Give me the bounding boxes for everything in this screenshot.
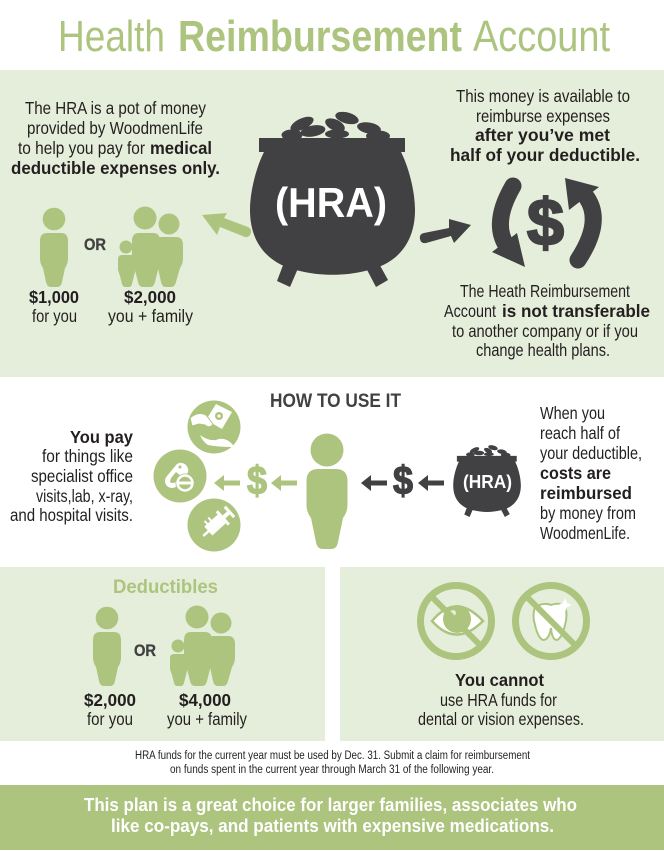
text block: not transferable: is not transferable: [502, 301, 650, 321]
banner: [0, 785, 664, 850]
footnote: on funds spent in the current year through March 31 of the following year.: [170, 764, 494, 776]
icon: green dollar: $: [247, 459, 267, 503]
icon: small pot: (HRA): [463, 472, 512, 492]
text block: when you reach half: reach half of: [540, 423, 620, 443]
arrow: green left 1: [214, 475, 240, 491]
text block: when you reach half: When you: [540, 403, 605, 423]
panel: you cannot: [340, 567, 664, 741]
text: $2,000 for you: $2,000: [84, 690, 136, 710]
text block: availability: half of your deductible.: [450, 145, 640, 165]
text: $1,000 for you: for you: [32, 306, 77, 326]
icon: small pot: [453, 444, 521, 517]
text block: availability: reimburse expenses: [476, 106, 610, 126]
text block: you cannot: use HRA funds for: [440, 690, 557, 710]
text block: not transferable: Account: [444, 301, 496, 321]
text block: HRA description: to help you pay for: [18, 138, 145, 158]
text: $4,000 you + family: [167, 690, 247, 729]
icon: single person: [93, 607, 121, 686]
text block: when you reach half: by money from: [540, 503, 636, 523]
icon: person: [306, 434, 348, 549]
text block: when you reach half: reimbursed: [540, 483, 632, 503]
text block: HRA description: [11, 98, 220, 178]
text: $4,000 you + family: you + family: [167, 709, 247, 729]
text: $1,000 for you: $1,000: [29, 287, 79, 307]
icon: syringe: [188, 498, 240, 552]
icon: no dental: [516, 586, 586, 656]
text block: availability: [450, 86, 640, 165]
text block: HRA description: deductible expenses only.: [11, 158, 220, 178]
arrow: pot to left: [202, 213, 251, 237]
heading: how to use it: HOW TO USE IT: [270, 391, 401, 412]
title: Health: [58, 12, 165, 61]
text block: when you reach half: costs are: [540, 463, 611, 483]
icon: family: [170, 606, 235, 686]
text: $1,000 for you: [29, 287, 79, 326]
heading: deductibles: Deductibles: [113, 577, 218, 598]
label: OR: OR: [134, 641, 156, 660]
title: Account: [473, 12, 610, 61]
arrow: green left 2: [271, 475, 297, 491]
text block: HRA description: medical: [150, 138, 212, 158]
icon: reimbursement cycle: [492, 178, 599, 267]
text block: you pay: You pay: [70, 427, 133, 447]
title: Reimbursement: [178, 12, 462, 61]
arrow: dark left 1: [361, 475, 387, 491]
text block: you cannot: You cannot: [455, 670, 544, 690]
banner: This plan is a great choice for larger families, associates who: [84, 795, 577, 815]
text block: not transferable: [444, 281, 650, 360]
footnote: HRA funds for the current year must be used by Dec. 31. Submit a claim for reimbursement: [135, 750, 531, 762]
text: $2,000 for you: [84, 690, 136, 729]
text block: HRA description: provided by WoodmenLife: [27, 118, 203, 138]
text block: you cannot: dental or vision expenses.: [418, 709, 584, 729]
icon: large pot of coins: [250, 110, 415, 287]
text block: you pay: for things like: [42, 446, 133, 466]
icon: family: [118, 206, 183, 287]
text block: not transferable: The Heath Reimbursement: [460, 281, 630, 301]
panel: deductibles: [0, 567, 325, 741]
text: $2,000 for you: for you: [87, 709, 133, 729]
banner: like co-pays, and patients with expensive medications.: [111, 816, 554, 836]
arrow: dark left 2: [418, 475, 444, 491]
title: [58, 12, 610, 61]
text block: you pay: and hospital visits.: [10, 505, 133, 525]
pot label: (HRA): [275, 179, 387, 226]
text block: when you reach half: [540, 403, 642, 543]
text block: when you reach half: WoodmenLife.: [540, 523, 630, 543]
text block: availability: after you’ve met: [475, 125, 610, 145]
panel: what the HRA is: [0, 70, 664, 377]
label: OR: OR: [84, 235, 106, 254]
icon: reimbursement cycle: $: [527, 185, 564, 259]
text block: you pay: visits,lab, x-ray,: [36, 486, 133, 506]
text: $2,000 you + family: [108, 287, 193, 326]
icon: single person: [40, 208, 68, 287]
footnote: [135, 750, 531, 776]
text block: not transferable: change health plans.: [476, 340, 610, 360]
text: $2,000 you + family: $2,000: [124, 287, 176, 307]
icon: dark dollar: $: [393, 459, 413, 503]
text block: you pay: specialist office: [31, 466, 133, 486]
text block: HRA description: The HRA is a pot of money: [25, 98, 206, 118]
text: $4,000 you + family: $4,000: [179, 690, 231, 710]
text: $2,000 you + family: you + family: [108, 306, 193, 326]
arrow: pot to right: [420, 219, 471, 243]
icon: money and hand: [188, 400, 240, 454]
text block: availability: This money is available to: [456, 86, 630, 106]
text block: when you reach half: your deductible,: [540, 443, 642, 463]
icon: no vision: [420, 586, 492, 656]
text block: you pay: [10, 427, 133, 525]
text block: you cannot: [418, 670, 584, 729]
icon: pills: [154, 450, 206, 502]
